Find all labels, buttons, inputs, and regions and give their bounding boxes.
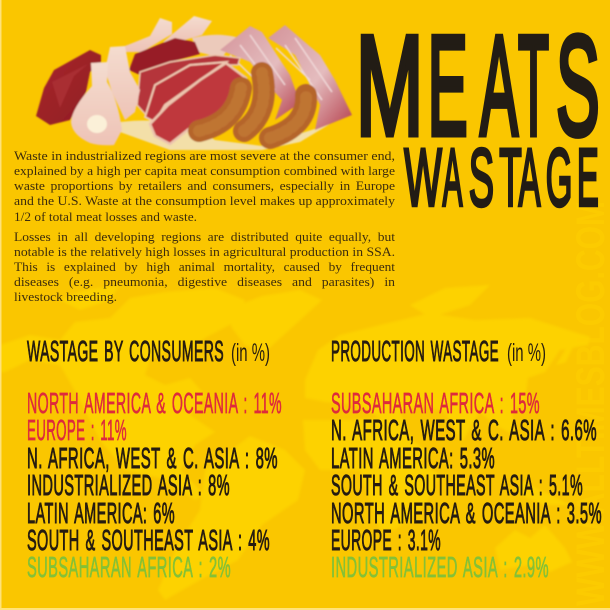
text block: industrialized regions: Waste in industrialized regions are most severe at the consumer end, xyxy=(14,149,395,163)
text block: developing regions xyxy=(14,230,396,304)
drumstick rear xyxy=(105,46,140,120)
text block: developing regions: diseases (e.g. pneumonia, digestive diseases and parasites) in xyxy=(14,275,396,289)
text block: industrialized regions xyxy=(14,149,396,224)
list: production wastage by region: EUROPE : 3.1% xyxy=(331,525,441,557)
heading: wastage by consumers: (in %) xyxy=(231,339,270,367)
steak main xyxy=(150,63,246,144)
ribs back xyxy=(268,25,352,130)
panel: wastage by consumers xyxy=(27,336,282,584)
heading: production wastage: (in %) xyxy=(507,339,546,367)
title: WASTAGE: A xyxy=(518,132,541,224)
title: WASTAGE: T xyxy=(499,132,522,224)
left beef xyxy=(36,50,101,125)
text block: industrialized regions: explained by a high per capita meat consumption combined with large xyxy=(14,164,395,178)
background world map xyxy=(0,285,590,600)
sausages xyxy=(199,73,306,138)
text block: developing regions: Losses in all developing regions are distributed quite equally, but xyxy=(14,230,396,244)
title: MEATS: T xyxy=(518,6,549,166)
text block: developing regions: This is explained by high animal mortality, caused by frequent xyxy=(14,260,396,274)
chicken leg upper left xyxy=(110,18,172,52)
title: WASTAGE: A xyxy=(442,132,463,224)
text block: developing regions: notable is the relatively high losses in agricultural production in SSA. xyxy=(14,245,395,259)
heading: wastage by consumers: WASTAGE BY CONSUMERS xyxy=(27,336,224,368)
text block: industrialized regions: and the U.S. Waste at the consumption level makes up approximately xyxy=(14,194,396,208)
chicken leg upper right xyxy=(163,16,212,42)
list: consumer wastage by region: INDUSTRIALIZED ASIA : 8% xyxy=(27,470,230,502)
heading: wastage by consumers xyxy=(27,336,270,368)
text block: industrialized regions: 1/2 of total meat losses and waste. xyxy=(14,210,197,224)
list: consumer wastage by region: SOUTH & SOUTHEAST ASIA : 4% xyxy=(27,525,270,557)
text block: industrialized regions: waste proportions by retailers and consumers, especially in Europe xyxy=(14,179,395,193)
illustration: raw meat assortment xyxy=(36,16,352,150)
title: WASTAGE: W xyxy=(404,132,442,224)
list: consumer wastage by region: N. AFRICA, WEST & C. ASIA : 8% xyxy=(27,443,278,475)
title: WASTAGE: S xyxy=(469,132,494,224)
title: MEATS: A xyxy=(480,6,518,166)
title: MEATS: E xyxy=(428,6,468,166)
wing xyxy=(192,35,236,58)
list: consumer wastage by region: EUROPE : 11% xyxy=(27,415,127,447)
list: consumer wastage by region xyxy=(27,388,282,584)
steak rear xyxy=(137,55,240,115)
title: MEATS xyxy=(356,6,600,166)
infographic canvas: NORTH AMERICA & OCEANIA : 11% xyxy=(27,388,282,420)
text block: developing regions: livestock breeding. xyxy=(14,290,117,304)
list: production wastage by region xyxy=(331,388,602,584)
ribs front xyxy=(220,26,300,120)
title: WASTAGE: G xyxy=(546,132,572,224)
steak middle xyxy=(145,62,226,122)
list: consumer wastage by region: SUBSAHARAN AFRICA : 2% xyxy=(27,552,231,584)
plate shadow xyxy=(120,120,330,150)
title: MEATS: M xyxy=(356,6,424,166)
list: consumer wastage by region: LATIN AMERICA: 6% xyxy=(27,498,175,530)
drumstick front xyxy=(71,62,122,145)
panel: production wastage xyxy=(331,336,602,584)
dark steak xyxy=(129,38,200,76)
title: WASTAGE xyxy=(404,132,599,224)
